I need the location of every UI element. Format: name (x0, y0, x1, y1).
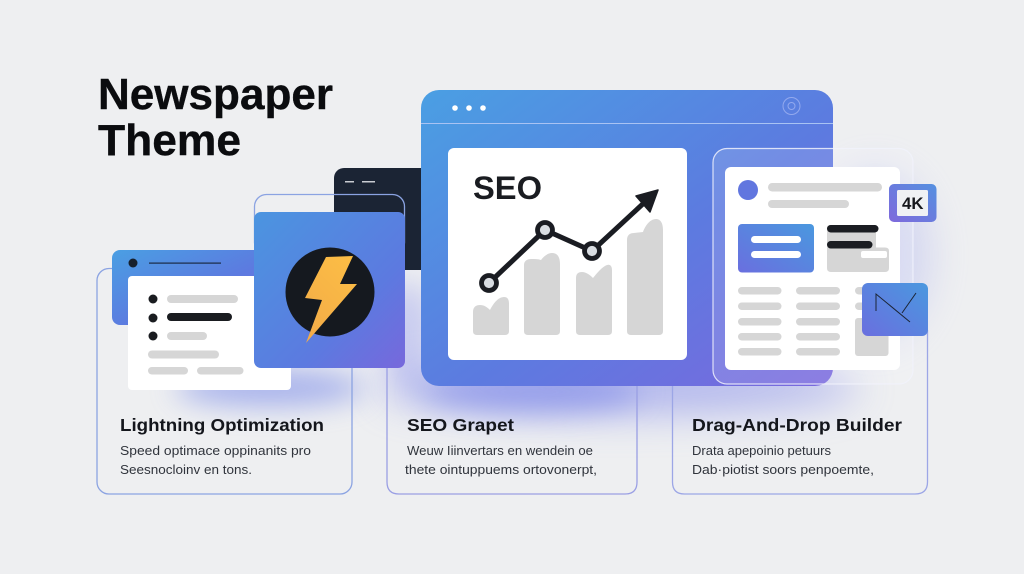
badge: 4K: 4K (902, 195, 924, 213)
window dots (452, 105, 486, 111)
panel: builder glass frame (713, 148, 913, 384)
trend line (482, 190, 658, 290)
title: Theme (98, 116, 241, 165)
blue block (738, 224, 814, 272)
icon: lightning bolt (286, 248, 374, 343)
card text: Drag-And-Drop Builder: Dab·piotist soors penpoemte, (692, 462, 874, 477)
title (98, 70, 333, 165)
dark window (334, 168, 434, 270)
card text: SEO Grapet: Weuw Iiinvertars en wendein oe (407, 443, 593, 458)
list rows (738, 287, 888, 356)
card text: Lightning Optimization (120, 443, 311, 477)
card heading: SEO Grapet: SEO Grapet (407, 415, 514, 435)
list rows (148, 294, 244, 374)
card heading: Lightning Optimization: Lightning Optimization (120, 415, 324, 435)
bar chart (473, 219, 663, 335)
card text: SEO Grapet: thete ointuppuems ortovonerpt, (405, 462, 597, 477)
card text: SEO Grapet (405, 443, 597, 477)
icon: small chart tile (862, 283, 928, 336)
main browser window (421, 90, 833, 386)
card text: Drag-And-Drop Builder: Drata apepoinio petuurs (692, 443, 831, 458)
page layout mock (725, 167, 900, 370)
title: Newspaper (98, 70, 333, 119)
SEO label: SEO (473, 170, 542, 206)
panel: SEO chart (448, 148, 687, 360)
background glow (175, 170, 930, 414)
card: Drag-And-Drop Builder (672, 330, 928, 494)
badge: 4K (889, 184, 936, 222)
card text: Lightning Optimization: Speed optimace oppinanits pro (120, 443, 311, 458)
card text: Drag-And-Drop Builder (692, 443, 874, 477)
card text: Lightning Optimization: Seesnocloinv en tons. (120, 462, 252, 477)
panel: lightning tile (254, 212, 405, 368)
header line (421, 123, 833, 124)
card: SEO Grapet (387, 360, 637, 494)
outline frame behind lightning tile (254, 194, 404, 254)
target icon (783, 98, 800, 114)
card heading: Drag-And-Drop Builder: Drag-And-Drop Builder (692, 415, 902, 435)
panel: small list window (112, 250, 291, 390)
card: Lightning Optimization (97, 268, 352, 494)
